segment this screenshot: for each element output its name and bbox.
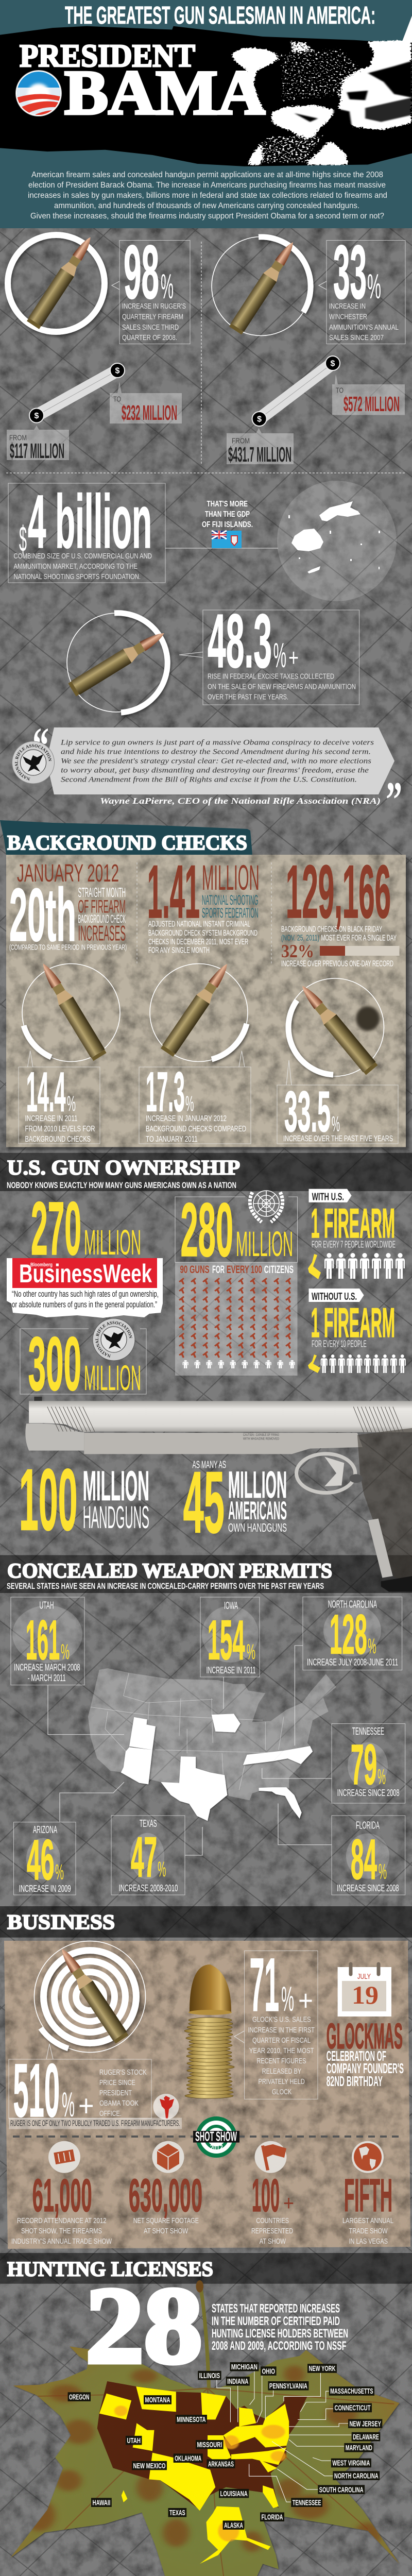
stat: 510% Ruger stock with target: 510 (13, 2048, 60, 2133)
icon: NRA seal: NATIONAL RIFLE ASSOCIATION (95, 1321, 132, 1358)
intro paragraph (28, 171, 387, 221)
stat: 17.3% ring: INCREASE IN JANUARY 2012 (146, 1114, 227, 1123)
intro paragraph: ammunition, and hundreds of thousands of new Americans carrying concealed handguns. (54, 201, 359, 210)
state: Florida (259, 1787, 302, 1819)
callout: Utah: INCREASE MARCH 2008 (14, 1662, 80, 1672)
stat: 510% Ruger stock with target: PRESIDENT (99, 2089, 132, 2097)
stat: 100+ countries: + (283, 2191, 294, 2215)
heading band (0, 1906, 412, 1938)
stat: fifth largest trade show: IN LAS VEGAS (349, 2237, 388, 2246)
stat: Glockmas calendar (327, 1964, 404, 2089)
section: background checks: MILLION (202, 858, 260, 897)
stat: 28 states: 28 (85, 2265, 202, 2386)
stat: 630,000 square feet: AT SHOT SHOW (144, 2227, 188, 2235)
state labels: FLORIDA (262, 2513, 283, 2521)
state labels: NEW MEXICO (133, 2462, 166, 2470)
state labels: HAWAII (93, 2498, 110, 2507)
stat: 45 million Americans own handguns: AS MANY AS (193, 1459, 226, 1470)
panel: crumpled paper (4, 1941, 410, 2249)
stat: Winchester 33% ring: WINCHESTER (329, 312, 367, 321)
section: concealed weapon permits (0, 1555, 412, 1895)
stat: 100+ countries: COUNTRIES (256, 2216, 289, 2225)
section: hunting licenses (0, 2253, 412, 2576)
card: Bloomberg BusinessWeek quote (7, 1258, 163, 1318)
stat: 61,000 attendance: 61,000 (32, 2170, 92, 2222)
heading: Obama: BAMA (64, 57, 265, 128)
stat: Winchester 33% ring: % (367, 267, 381, 306)
stat: Ruger 98% ring: % (161, 267, 174, 306)
stat: 510% Ruger stock with target: % (62, 2085, 75, 2124)
section: background checks (0, 820, 409, 1150)
stat: 1.41 million checks: FOR ANY SINGLE MONTH (148, 946, 210, 955)
text: pistol engraving: CAUTION - CAPABLE OF FIRING (243, 1433, 279, 1437)
stat: 510% Ruger stock with target: + (78, 2089, 94, 2123)
icon: NRA seal: NATIONAL RIFLE ASSOCIATION (14, 744, 52, 781)
stat: Ruger 98% ring: SALES SINCE THIRD (122, 323, 179, 332)
state labels: WEST VIRGINIA (332, 2459, 370, 2468)
card: Bloomberg BusinessWeek quote: “No other country has such high rates of gun ownership, (12, 1289, 159, 1299)
stat: 510% Ruger stock with target (9, 1941, 182, 2133)
stat: Ruger 98% ring: QUARTER OF 2008. (122, 333, 177, 342)
icon: Fiji flag (212, 531, 242, 548)
callout: Arizona: ARIZONA (33, 1824, 57, 1836)
callout: Utah: % (61, 1640, 70, 1664)
chart: Ruger sales rise from 117 to 232 million: FROM (9, 434, 27, 442)
state labels: TEXAS (169, 2509, 185, 2517)
heading band (0, 1555, 412, 1593)
icon: Shot Show 2012 target: 2012 (210, 2143, 223, 2153)
stat: 100 million handguns: 100 (19, 1451, 77, 1549)
state: Tennessee (243, 1751, 283, 1765)
stat: 71% Glock sales: GLOCK'S U.S. SALES (252, 2015, 311, 2024)
callout: Iowa: IOWA (224, 1600, 238, 1612)
callout: Iowa: % (247, 1640, 255, 1664)
section: background checks: SPORTS FEDERATION (202, 905, 259, 921)
callout: Arizona: % (55, 1860, 64, 1884)
illustration: silver long-slide pistol (25, 1397, 412, 1592)
state labels: ARKANSAS (208, 2460, 234, 2468)
stat: fifth largest trade show (342, 2141, 393, 2246)
stat: 71% Glock sales: GLOCK (272, 2088, 291, 2096)
section: U.S. gun ownership: MILLION (83, 1463, 149, 1510)
icon: bullet in ring (67, 613, 168, 713)
callout: Iowa (200, 1597, 260, 1709)
panel: $4 billion market size (8, 480, 397, 601)
text: pistol engraving (243, 1433, 279, 1440)
callout: Florida: FLORIDA (356, 1820, 380, 1831)
section: U.S. gun ownership (0, 1153, 412, 1552)
callout: Texas: INCREASE 2008-2010 (119, 1883, 178, 1893)
stat: 1.41 million checks (147, 850, 260, 955)
state labels: MINNESOTA (177, 2415, 206, 2424)
stat: 71% Glock sales: RELEASED BY (262, 2067, 301, 2076)
stat: January 2012 20th month: (COMPARED TO SAME PERIOD IN PREVIOUS YEAR) (9, 943, 127, 952)
state labels: ILLINOIS (199, 2371, 220, 2380)
section: background checks: OF FIREARM (78, 896, 126, 917)
state labels: MASSACHUSETTS (330, 2387, 373, 2396)
state labels: PENNSYLVANIA (269, 2382, 307, 2391)
stat: 71% Glock sales: RECENT FIGURES (256, 2057, 306, 2065)
stat: 270 million: 270 (31, 1187, 81, 1271)
panel: Ruger and Winchester sales: $232 MILLION (122, 401, 177, 425)
stat: 61,000 attendance: INDUSTRY'S ANNUAL TRADE SHOW (11, 2237, 112, 2246)
callout: Florida (278, 1803, 405, 1895)
stat: without U.S. one firearm per ten people (308, 1289, 407, 1373)
icon: ticket (48, 2141, 80, 2173)
callout: Utah (11, 1597, 124, 1735)
stat: $4 billion: NATIONAL SHOOTING SPORTS FOUNDATION. (13, 572, 141, 581)
intro paragraph: American firearm sales and concealed handgun permit applications are at all-time highs since the 2008 (31, 171, 383, 179)
stat: 100+ countries: AT SHOW (260, 2237, 286, 2246)
quote text: Second Amendment from the Bill of Rights and excise it from the U.S. Constitution. (61, 775, 357, 784)
icon: Shot Show 2012 target (193, 2119, 239, 2156)
callout: Texas: TEXAS (140, 1818, 157, 1829)
chart: 90 guns for every 100 citizens: 90 GUNS (180, 1264, 209, 1276)
section: background checks: BACKGROUND CHECK (78, 912, 126, 925)
stat: 48.3%: 48.3 (208, 599, 272, 684)
stat: 71% Glock sales: INCREASE IN THE FIRST (248, 2026, 315, 2035)
section: U.S. gun ownership: MILLION (84, 1223, 141, 1262)
attribution: Wayne LaPierre, CEO of the National Rifle Association (NRA) (100, 796, 381, 806)
stat: 71% Glock sales: % (281, 1979, 294, 2019)
stat: 14.4% ring: BACKGROUND CHECKS (25, 1135, 91, 1144)
stat: 33.5% ring with bullet hole (277, 978, 398, 1144)
quote mark close: ” (386, 771, 402, 828)
photo: torn black band with high-contrast portrait (0, 15, 412, 166)
state labels: SOUTH CAROLINA (319, 2485, 364, 2494)
stat: $4 billion: COMBINED SIZE OF U.S. COMMERCIAL GUN AND (13, 552, 152, 561)
intro paragraph: election of President Barack Obama. The increase in Americans purchasing firearms has meant massive (28, 181, 386, 190)
quote text: Lip service to gun owners is just part of a massive Obama conspiracy to deceive voters (60, 738, 374, 747)
icon: flag (254, 2141, 286, 2173)
stat: $4 billion (8, 480, 278, 583)
stat: $4 billion: AMMUNITION MARKET, ACCORDING TO THE (13, 562, 138, 571)
section: U.S. gun ownership: AMERICANS (228, 1496, 287, 1525)
state labels (68, 2362, 382, 2530)
leaf stem (200, 2282, 209, 2388)
stat: Ruger 98% ring (8, 230, 190, 344)
stat: 630,000 square feet: NET SQUARE FOOTAGE (133, 2216, 199, 2225)
chart: 90 guns for every 100 citizens: EVERY 100 (227, 1264, 262, 1276)
illustration: bullet on stack of coins (184, 1964, 234, 2098)
stat: 14.4% ring: INCREASE IN 2011 (25, 1114, 78, 1123)
stat: without U.S. one firearm per ten people: WITHOUT U.S. (312, 1291, 357, 1302)
stat: 14.4% ring: 14.4 (26, 1060, 66, 1123)
icon: Ruger logo (153, 2094, 179, 2120)
stat: 61,000 attendance: SHOT SHOW, THE FIREARMS (21, 2227, 102, 2235)
callout: Texas: 47 (131, 1826, 157, 1889)
stat: January 2012 20th month: JANUARY 2012 (17, 860, 119, 887)
callout: Iowa: 154 (208, 1609, 245, 1672)
stat: with U.S. one firearm per seven people (308, 1189, 407, 1279)
subheading: NOBODY KNOWS EXACTLY HOW MANY GUNS AMERICANS OWN AS A NATION (7, 1180, 236, 1190)
callout: Utah: UTAH (39, 1600, 54, 1612)
stat: 280 million UN: 280 (180, 1188, 233, 1273)
state: Utah (129, 1717, 156, 1750)
heading: BACKGROUND CHECKS (7, 831, 247, 854)
stat: 61,000 attendance: RECORD ATTENDANCE AT 2012 (17, 2216, 107, 2225)
chart: Winchester sales rise from 431.7 to 572 million (227, 356, 405, 466)
stat: 45 million Americans own handguns: 45 (183, 1454, 225, 1552)
stat: 33.5% ring with bullet hole: % (332, 1112, 340, 1136)
icon: calendar July 19: JULY (357, 1972, 371, 1981)
chart: Ruger sales rise from 117 to 232 million: $117 MILLION (10, 439, 64, 463)
callout: Florida: % (379, 1859, 387, 1884)
heading: HUNTING LICENSES (7, 2258, 213, 2280)
stat: 630,000 square feet (129, 2141, 202, 2235)
stat: 17.3% ring: % (185, 1091, 194, 1116)
stat: with U.S. one firearm per seven people: WITH U.S. (312, 1192, 344, 1203)
quote mark open: “ (32, 717, 49, 774)
chart: 90 guns for every 100 citizens: FOR (212, 1264, 225, 1276)
icon: calendar July 19: 19 (352, 1980, 379, 2009)
stat: 71% Glock sales: QUARTER OF FISCAL (252, 2036, 311, 2045)
heading band (0, 1153, 412, 1191)
section: U.S. gun ownership: MILLION (236, 1224, 293, 1264)
text: more than GDP of Fiji: THAN THE GDP (205, 510, 250, 519)
state labels: MONTANA (145, 2396, 170, 2404)
stat: fifth largest trade show: LARGEST ANNUAL (342, 2216, 393, 2225)
callout: Tennessee: % (377, 1765, 386, 1789)
icon: United Nations emblem (250, 1191, 283, 1222)
icon: target rings with bullet (34, 1941, 145, 2053)
callout: North Carolina (295, 1597, 402, 1745)
text: pistol engraving: WITH MAGAZINE REMOVED (243, 1437, 279, 1440)
stat: 61,000 attendance (11, 2141, 112, 2246)
panel: Ruger and Winchester sales (6, 230, 405, 473)
state labels: UTAH (127, 2436, 141, 2445)
stat: 48.3%: ON THE SALE OF NEW FIREARMS AND AMMUNITION (208, 682, 356, 691)
stat: 100+ countries: REPRESENTED (251, 2227, 293, 2235)
stat: 17.3% ring: TO JANUARY 2011 (146, 1135, 198, 1144)
state: Iowa (212, 1714, 241, 1733)
state labels: NEW JERSEY (349, 2419, 381, 2428)
chart: Winchester sales rise from 431.7 to 572 million: $ (257, 415, 262, 423)
map: Fiji islands in circle (277, 481, 397, 601)
label leader lines (217, 2371, 352, 2502)
stat: $4 billion: 4 billion (28, 480, 152, 564)
state labels: ALASKA (224, 2521, 243, 2530)
quote panel (46, 727, 394, 794)
heading: President: PRESIDENT (20, 39, 195, 74)
column dividers (137, 862, 271, 965)
stat: 1.41 million checks: ADJUSTED NATIONAL INSTANT CRIMINAL (148, 920, 250, 929)
icon: Obama campaign logo (15, 70, 62, 120)
stat: 129,166 Black Friday (281, 850, 400, 969)
state labels: OHIO (262, 2367, 275, 2376)
stat: 510% Ruger stock with target: OFFICE. (99, 2109, 122, 2118)
stat: $4 billion: $ (19, 519, 27, 559)
quote text: We see the president's strategy crystal clear: Get re-elected and, with no more elections (61, 757, 371, 766)
section: U.S. gun ownership: HANDGUNS (83, 1500, 149, 1535)
panel: 48.3% excise tax rise (67, 599, 359, 713)
state: Texas (161, 1756, 227, 1821)
heading: U.S. GUN OWNERSHIP (7, 1156, 240, 1179)
state labels: INDIANA (227, 2377, 248, 2386)
callout: North Carolina: % (368, 1634, 376, 1658)
heading banner (0, 820, 252, 855)
text: more than GDP of Fiji: THAT'S MORE (207, 500, 248, 509)
intro paragraph: increases in sales by gun makers, billions more in federal and state tax collections related to firearms and (28, 191, 387, 200)
icon: box (152, 2141, 184, 2173)
quote text (60, 738, 374, 784)
callout: Arizona: 46 (27, 1828, 55, 1892)
note strip (9, 2118, 182, 2129)
icon row: citizens (180, 1360, 298, 1368)
illustration: leaf with U.S. map (0, 2280, 400, 2576)
text: more than GDP of Fiji: OF FIJI ISLANDS. (202, 520, 253, 529)
state labels: LOUISIANA (220, 2489, 248, 2498)
stat: 71% Glock sales: 71 (250, 1943, 279, 2027)
stat: 28 states (85, 2265, 348, 2386)
stat: 510% Ruger stock with target: RUGER IS ONE OF ONLY TWO PUBLICLY TRADED U.S. FIREARM MANUFACTURERS. (10, 2120, 180, 2128)
text: more than GDP of Fiji (202, 500, 253, 529)
stat: 300 million with NRA seal: 300 (28, 1321, 81, 1406)
chart: Winchester sales rise from 431.7 to 572 million: $431.7 MILLION (228, 443, 291, 466)
section: U.S. gun ownership: MILLION (228, 1464, 287, 1506)
state labels: MICHIGAN (231, 2363, 258, 2371)
state labels: MISSOURI (197, 2441, 222, 2449)
section: business (0, 1906, 412, 2249)
state labels: DELAWARE (353, 2433, 379, 2442)
callout: Tennessee (262, 1724, 405, 1803)
stat: 48.3%: % (273, 636, 286, 675)
icon grid: guns (177, 1277, 296, 1360)
stat: 17.3% ring: 17.3 (146, 1060, 185, 1123)
heading: BUSINESS (7, 1910, 115, 1934)
state labels: MARYLAND (346, 2444, 372, 2452)
stat: 48.3% (179, 599, 359, 705)
callout: Tennessee: 79 (351, 1733, 377, 1797)
quote text: to worry about, get busy dismantling and destroying our firearms' freedom, erase the (61, 767, 369, 775)
stat: 17.3% ring (139, 959, 251, 1144)
teal banner background (0, 0, 412, 228)
divider lines (6, 242, 405, 473)
card: Bloomberg BusinessWeek quote: or absolute numbers of guns in the general population.” (12, 1299, 157, 1310)
stat: January 2012 20th month (9, 860, 127, 957)
state labels: OREGON (69, 2393, 89, 2401)
stat: 17.3% ring: BACKGROUND CHECKS COMPARED (146, 1125, 246, 1133)
heading band (0, 2253, 412, 2284)
card: Bloomberg BusinessWeek quote: Bloomberg (30, 1262, 53, 1268)
stat: 100+ countries: 100 (252, 2170, 280, 2222)
state: Arizona (121, 1747, 152, 1784)
stat: 48.3%: + (288, 645, 299, 672)
card: Bloomberg BusinessWeek quote: BusinessWeek (19, 1259, 152, 1288)
chart: Ruger sales rise from 117 to 232 million (7, 363, 182, 463)
stat: 129,166 Black Friday: 32% (281, 941, 314, 961)
stat: 48.3%: RISE IN FEDERAL EXCISE TAXES COLLECTED (208, 672, 334, 681)
chart: Ruger sales rise from 117 to 232 million: $ (115, 367, 120, 375)
callout: Wayne LaPierre quote (12, 717, 402, 828)
stat: 510% Ruger stock with target: PRICE SINCE (99, 2078, 135, 2087)
icon: Shot Show 2012 target: SHOT SHOW (195, 2129, 237, 2144)
state labels: NORTH CAROLINA (334, 2471, 379, 2480)
panel: wood board (6, 855, 409, 1150)
stat: Ruger 98% ring: 98 (124, 230, 159, 315)
stat: 1.41 million checks: BACKGROUND CHECK SYSTEM BACKGROUND (148, 929, 258, 938)
section: background checks: STRAIGHT MONTH (78, 885, 126, 900)
callout: Texas (111, 1816, 202, 1895)
chart: 90 guns for every 100 citizens: CITIZENS (264, 1264, 294, 1276)
stat: 14.4% ring (19, 959, 120, 1144)
section: business: 630,000 (129, 2170, 202, 2222)
stat: 71% Glock sales: + (298, 1984, 313, 2016)
chart: 90 guns for every 100 citizens (175, 1262, 298, 1376)
stat: 14.4% ring: FROM 2010 LEVELS FOR (25, 1125, 95, 1133)
stat: Ruger 98% ring: QUARTERLY FIREARM (122, 312, 183, 321)
state labels: OKLAHOMA (175, 2454, 201, 2463)
heading: CONCEALED WEAPON PERMITS (7, 1559, 332, 1582)
chart: Winchester sales rise from 431.7 to 572 million: TO (336, 386, 344, 395)
stat: 71% Glock sales (234, 1943, 318, 2099)
chart: Ruger sales rise from 117 to 232 million: TO (113, 395, 121, 404)
section: background checks: NATIONAL SHOOTING (202, 892, 259, 908)
callout: Utah: - MARCH 2011 (28, 1673, 66, 1683)
chart: Winchester sales rise from 431.7 to 572 million: FROM (232, 437, 250, 446)
stat: 1.41 million checks: CHECKS IN DECEMBER 2011, MOST EVER (148, 938, 248, 946)
stat: 71% Glock sales: PRIVATELY HELD (259, 2077, 305, 2086)
section: U.S. gun ownership: MILLION (84, 1358, 141, 1398)
stat: 33.5% ring with bullet hole: 33.5 (284, 1080, 331, 1144)
callout: Arizona (13, 1782, 124, 1895)
map: states with increases highlighted (97, 2381, 307, 2564)
stat: 71% Glock sales: YEAR 2010, THE MOST (249, 2046, 314, 2055)
stat: 48.3%: OVER THE PAST FIVE YEARS. (208, 692, 288, 702)
state: North Carolina (273, 1746, 313, 1764)
chart: Ruger sales rise from 117 to 232 million: $ (35, 412, 39, 420)
stat: 510% Ruger stock with target: OBAMA TOOK (99, 2099, 139, 2108)
header banner (0, 0, 412, 228)
map: United States with highlighted states (88, 1668, 336, 1821)
callout: Iowa: INCREASE IN 2011 (206, 1665, 255, 1675)
chart: Winchester sales rise from 431.7 to 572 million: $ (331, 360, 335, 368)
quote text: and hide his true intentions to destroy the Second Amendment during his second term. (61, 748, 371, 756)
callout: Arizona: INCREASE IN 2009 (19, 1884, 71, 1894)
stat: 45 million Americans own handguns: OWN HANDGUNS (228, 1521, 287, 1534)
state labels: NEW YORK (309, 2364, 336, 2373)
stat: 14.4% ring: % (67, 1091, 76, 1116)
callout: Utah: 161 (26, 1609, 60, 1672)
icon: calendar July 19 (338, 1964, 391, 2016)
state labels: TENNESSEE (293, 2498, 321, 2507)
intro paragraph: Given these increases, should the firearms industry support President Obama for a second term or not? (30, 212, 384, 221)
callout: Florida: 84 (351, 1828, 377, 1891)
stat: Winchester 33% ring (212, 230, 405, 344)
stat: 510% Ruger stock with target: RUGER'S STOCK (99, 2068, 147, 2077)
section: background checks: INCREASES (78, 921, 126, 945)
stat: fifth largest trade show: TRADE SHOW (349, 2227, 388, 2235)
stat: Winchester 33% ring: INCREASE IN (329, 302, 366, 311)
stat: 129,166 Black Friday: (NOV. 25, 2011) (281, 934, 319, 943)
stat: Ruger 98% ring: INCREASE IN RUGER'S (122, 302, 186, 311)
stat: 100+ countries (251, 2141, 294, 2246)
state labels: CONNECTICUT (335, 2404, 371, 2413)
stat: January 2012 20th month: 20th (9, 873, 76, 957)
icon: globe (352, 2141, 384, 2173)
callout: Texas: % (158, 1857, 166, 1882)
dashed divider (13, 2136, 403, 2138)
stat: Winchester 33% ring: SALES SINCE 2007 (329, 333, 384, 342)
stat: 1.41 million checks: 1.41 (147, 850, 200, 934)
